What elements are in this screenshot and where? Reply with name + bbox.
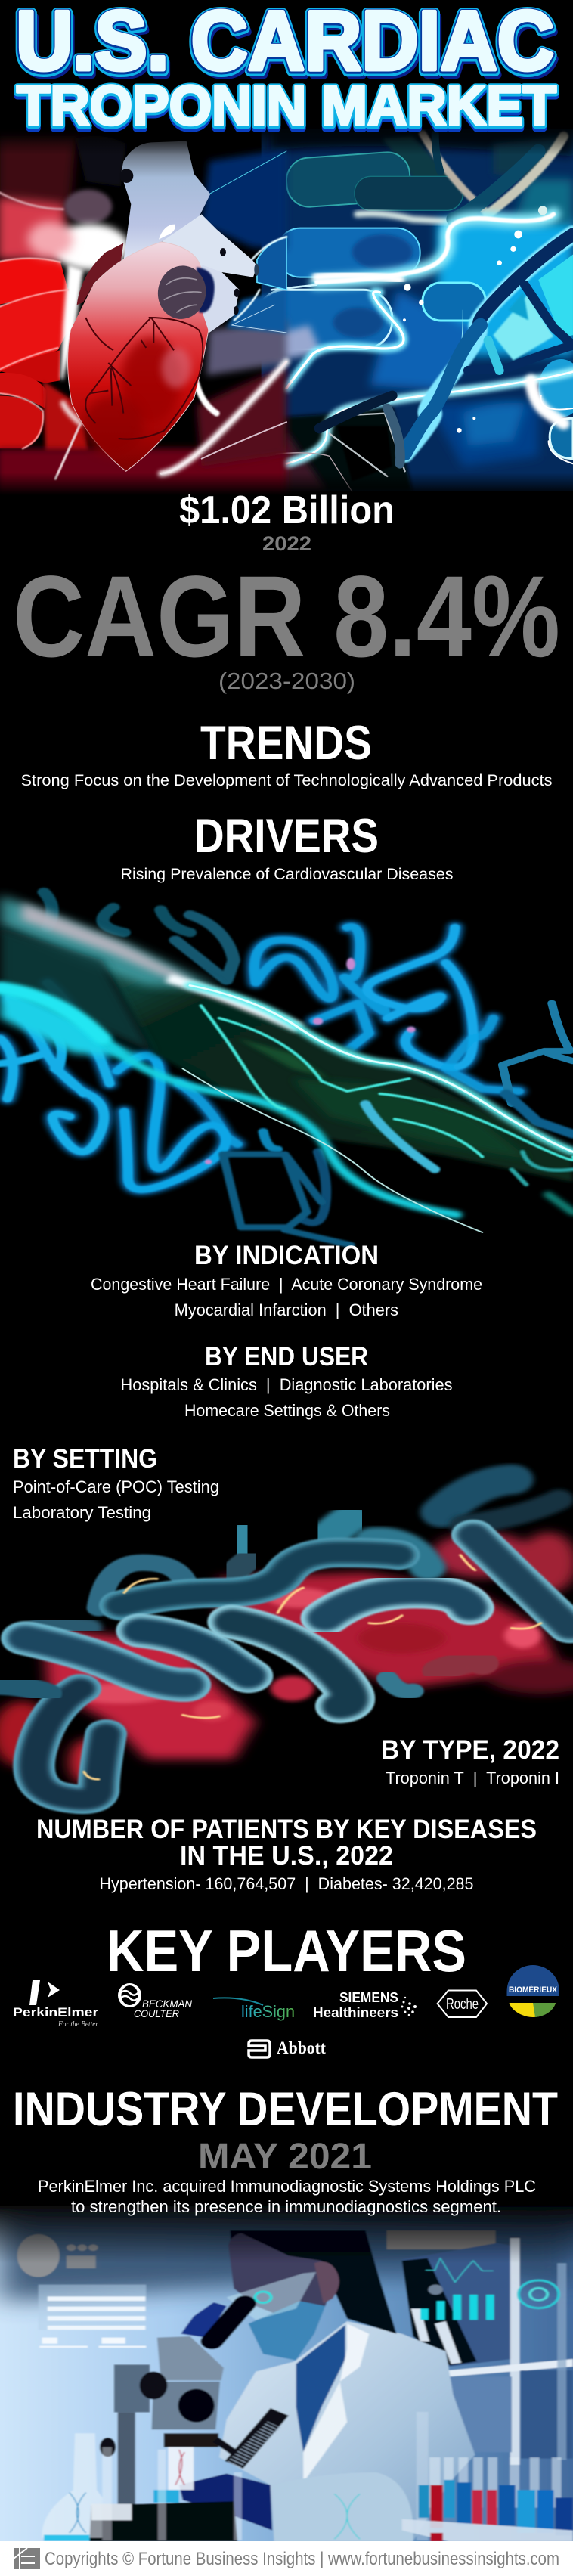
development date: MAY 2021 [198, 2137, 372, 2177]
setting list item 1: Point-of-Care (POC) Testing [13, 1477, 219, 1496]
scientist figure [179, 2230, 475, 2542]
left half: red glow and heart [0, 136, 286, 497]
development description [38, 2177, 536, 2216]
logo: Siemens Healthineers [313, 1990, 417, 2020]
footer [0, 2541, 573, 2576]
heading: number of patients: IN THE U.S., 2022 [180, 1841, 393, 1871]
logo: bioMerieux [506, 1965, 559, 2017]
image: blood vessel network [0, 892, 573, 1245]
indication list line 2: Myocardial Infarction | Others [175, 1300, 398, 1319]
logo: PerkinElmer: PerkinElmer [13, 2005, 98, 2020]
logo: Beckman Coulter [118, 1983, 193, 2020]
logo: Roche: Roche [446, 1996, 479, 2013]
HUD graphics [17, 2230, 495, 2348]
end user list line 2: Homecare Settings & Others [184, 1401, 390, 1420]
market value: $1.02 Billion [179, 488, 395, 532]
heading: by type: BY TYPE, 2022 [381, 1735, 559, 1765]
heading: number of patients: NUMBER OF PATIENTS BY KEY DISEASES [36, 1815, 537, 1844]
logo: Siemens Healthineers: SIEMENS [339, 1990, 398, 2005]
logo: Beckman Coulter: BECKMAN [142, 1998, 193, 2010]
logo: PerkinElmer [13, 1980, 98, 2029]
white flare behind heart [28, 222, 129, 380]
patient figures: Hypertension- 160,764,507 | Diabetes- 32,420,285 [100, 1874, 473, 1893]
logo: Abbott: Abbott [277, 2038, 326, 2057]
indication list line 1: Congestive Heart Failure | Acute Coronary Syndrome [91, 1275, 482, 1294]
shelves and binders [402, 2238, 573, 2465]
title: TROPONIN MARKET [17, 74, 556, 137]
icon: Fortune Business Insights logo [14, 2548, 40, 2569]
glassware and test tubes [42, 2412, 573, 2542]
logo: Abbott [249, 2038, 326, 2057]
icon: heart [68, 141, 259, 471]
development description: PerkinElmer Inc. acquired Immunodiagnostic Systems Holdings PLC [38, 2177, 536, 2196]
logo: bioMerieux: BIOMÉRIEUX [509, 1985, 558, 1995]
heading: key players: KEY PLAYERS [107, 1917, 466, 1984]
microscope [89, 2304, 280, 2542]
drivers text: Rising Prevalence of Cardiovascular Diseases [121, 866, 454, 883]
logo: Siemens Healthineers: Healthineers [313, 2005, 398, 2020]
logo: Roche [438, 1990, 487, 2017]
right half: DNA in blue light [256, 129, 573, 491]
title: TROPONIN MARKET [17, 78, 556, 141]
title: TROPONIN MARKET [17, 75, 556, 138]
hero image: heart and DNA [0, 125, 573, 497]
trends text: Strong Focus on the Development of Technologically Advanced Products [21, 772, 552, 789]
setting list item 2: Laboratory Testing [13, 1503, 151, 1522]
logo: lifeSign [213, 1998, 295, 2021]
forecast period: (2023-2030) [218, 668, 355, 694]
heading: trends: TRENDS [200, 717, 372, 770]
type list: Troponin T | Troponin I [386, 1768, 559, 1787]
heading: number of patients [36, 1815, 537, 1871]
logo: Beckman Coulter: COULTER [134, 2007, 179, 2020]
logo: PerkinElmer: For the Better [57, 2020, 98, 2029]
base year: 2022 [262, 532, 311, 555]
heading: by end user: BY END USER [205, 1342, 368, 1372]
logo: lifeSign: lifeSign [241, 2002, 295, 2021]
title [16, 0, 557, 141]
heading: drivers: DRIVERS [194, 810, 379, 863]
image: scientist at microscope [0, 2202, 573, 2547]
image: chain-like protein links [0, 1480, 573, 1799]
heading: by indication: BY INDICATION [194, 1241, 379, 1270]
heading: by setting: BY SETTING [13, 1444, 157, 1474]
end user list line 1: Hospitals & Clinics | Diagnostic Laboratories [121, 1375, 452, 1394]
development description: to strengthen its presence in immunodiagnostics segment. [71, 2197, 501, 2216]
